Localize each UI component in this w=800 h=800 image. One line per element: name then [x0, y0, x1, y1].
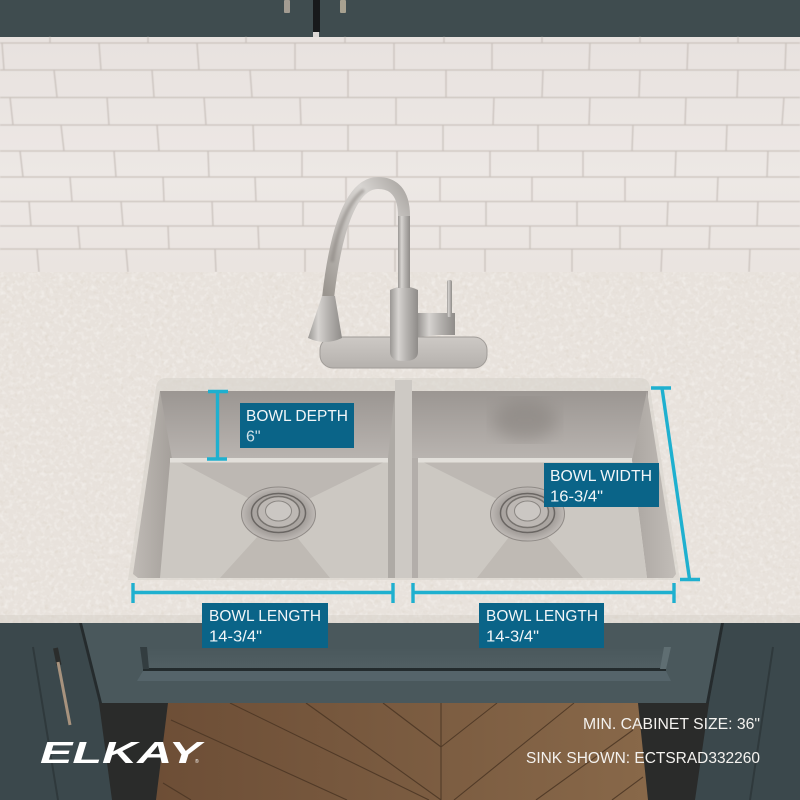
label: bowl width: 16-3/4": [550, 488, 603, 506]
dimension: left bowl length: [133, 583, 393, 648]
label: bowl depth: 6": [246, 428, 261, 446]
label: bowl depth: [240, 403, 354, 448]
sink rim: [128, 378, 680, 580]
left drain: [242, 487, 316, 541]
dark toe-kick interior: [99, 703, 709, 800]
stainless sink: [128, 378, 680, 580]
label: left bowl length: 14-3/4": [209, 628, 262, 646]
pull-down spray head: [308, 296, 342, 342]
faucet: [308, 183, 487, 368]
label: left bowl length: BOWL LENGTH: [209, 608, 321, 625]
cabinet size note: MIN. CABINET SIZE: 36": [583, 716, 760, 733]
upper cabinets: [0, 0, 800, 38]
recessed false-front panel: [137, 647, 671, 681]
deck plate: [320, 337, 487, 368]
faucet body: [390, 286, 418, 361]
cabinet handle right: [340, 0, 346, 13]
label: bowl width: [544, 463, 659, 507]
left bowl: [133, 391, 395, 578]
neck: [398, 216, 410, 288]
right bowl: [412, 391, 676, 578]
cabinet handle left: [284, 0, 290, 13]
side mixer: [418, 313, 455, 337]
door grooves: [33, 647, 773, 800]
divider between bowls: [395, 380, 412, 578]
lower cabinet and floor: [0, 623, 800, 800]
Elkay logo: ELKAY: [40, 735, 206, 770]
right drain: [490, 487, 564, 541]
door handle: [56, 648, 70, 725]
label: right bowl length: [479, 603, 604, 648]
label: right bowl length: 14-3/4": [486, 628, 539, 646]
label: right bowl length: BOWL LENGTH: [486, 608, 598, 625]
label: left bowl length: [202, 603, 328, 648]
spout arc: [328, 183, 404, 298]
label: bowl depth: BOWL DEPTH: [246, 408, 348, 425]
sink base frame: [79, 623, 724, 703]
speckled quartz countertop: [0, 272, 800, 624]
dimension: bowl depth: [207, 391, 354, 459]
tile backsplash: [0, 37, 800, 273]
wood chevron floor: [156, 703, 648, 800]
Elkay logo: ®: [195, 758, 199, 765]
Elkay logo: [40, 735, 206, 770]
lever handle: [447, 280, 452, 317]
dimension: right bowl length: [413, 583, 675, 648]
dimension: bowl width: [544, 388, 700, 580]
label: bowl width: BOWL WIDTH: [550, 468, 652, 485]
sink model note: SINK SHOWN: ECTSRAD332260: [526, 750, 760, 767]
